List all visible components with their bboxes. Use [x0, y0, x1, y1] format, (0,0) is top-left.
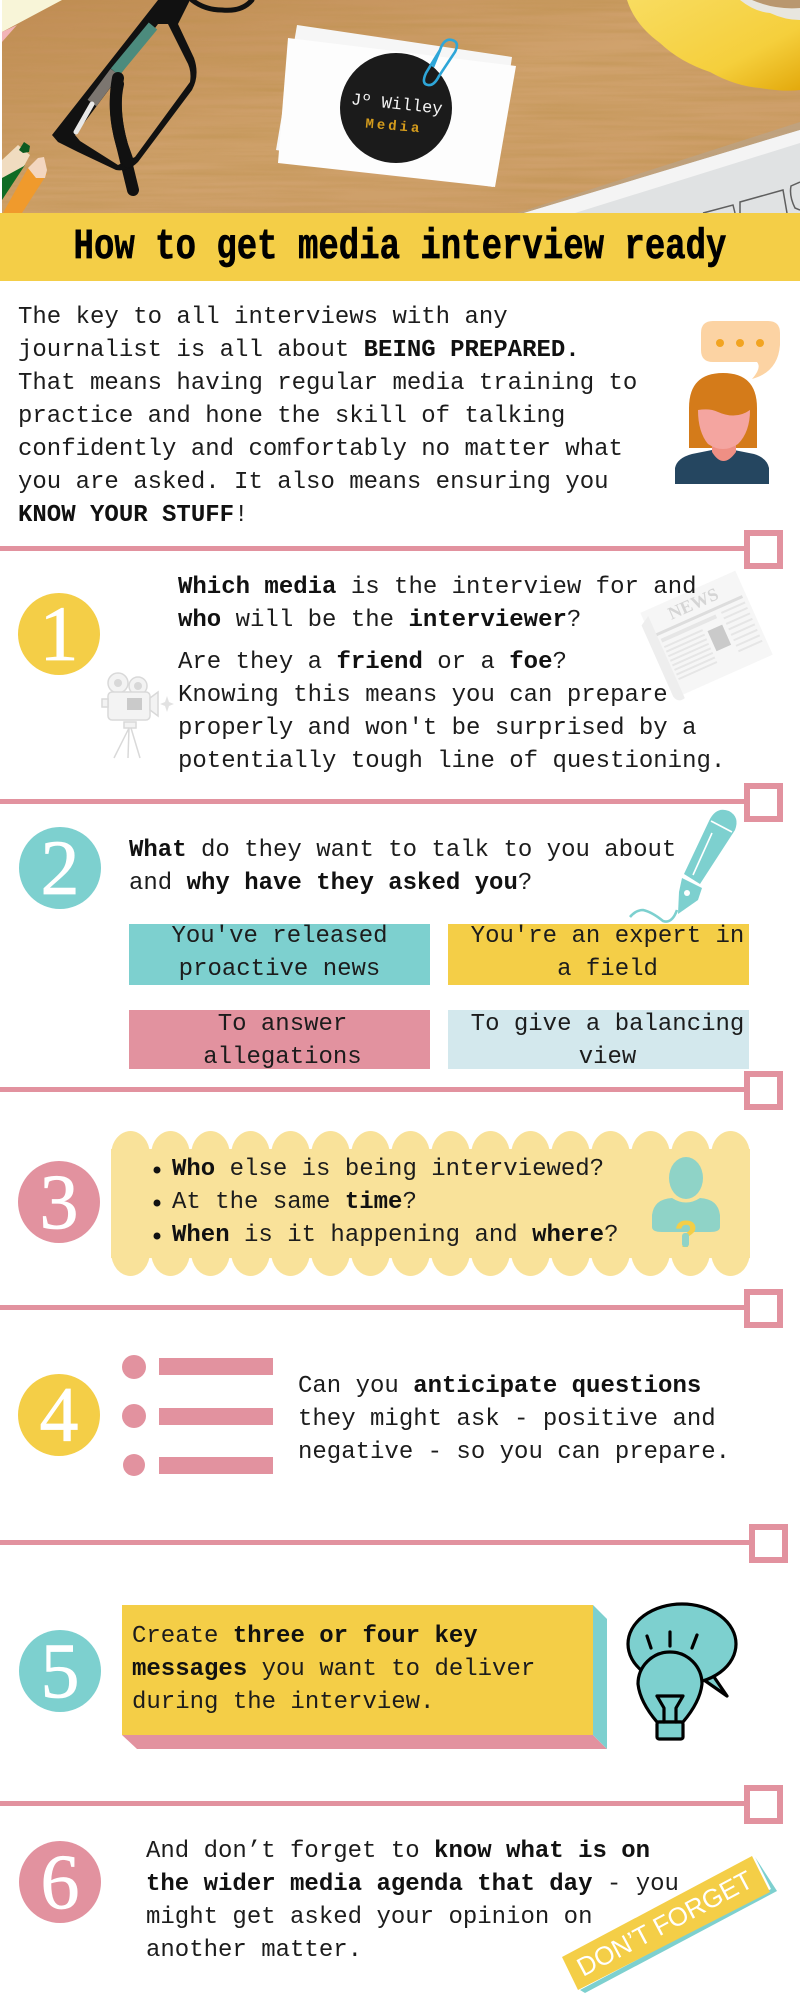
- paperclip: [424, 40, 457, 85]
- logo disc: [340, 53, 452, 163]
- step 6 text: And don’t forget to know what is on the wider media agenda that day - you might get asked your opinion on another matter.: [146, 1838, 679, 1964]
- divider end square: [749, 1524, 788, 1563]
- keyboard: [517, 122, 800, 213]
- divider: [0, 1540, 755, 1545]
- scalloped panel: [111, 1131, 750, 1276]
- number 4: 4: [40, 1371, 78, 1458]
- option box: proactive news: [129, 924, 430, 985]
- intro text: The key to all interviews with any journalist is all about BEING PREPARED. That means having regular media training to practice and hone the skill of talking confidently and comfortably no matter what you are asked. It also means ensuring you KNOW YOUR STUFF!: [18, 304, 637, 529]
- option box: allegations: [129, 1010, 430, 1069]
- number 5: [19, 1630, 101, 1712]
- option box: expert: You're an expert in a field: [471, 923, 744, 983]
- number 1: [18, 593, 100, 675]
- icon: fountain pen: [629, 810, 736, 923]
- step 1 detail text: Are they a friend or a foe? Knowing this means you can prepare properly and won't be surprised by a potentially tough line of questioning.: [178, 649, 725, 775]
- business card: Media: [365, 117, 423, 137]
- number 6: 6: [40, 1838, 80, 1925]
- icon: newspaper: NEWS: [665, 584, 721, 624]
- divider end square: [744, 530, 783, 569]
- divider: [0, 1801, 750, 1806]
- bullet dots: [154, 1166, 160, 1240]
- yellow cup: [627, 0, 800, 91]
- step 1 text: Which media is the interview for and who will be the interviewer?: [178, 574, 696, 634]
- icon: woman with speech bubble: [675, 321, 780, 484]
- icon: film camera: [101, 672, 174, 758]
- hero photo: desk with glasses, business card and cup: [2, 0, 800, 213]
- divider end square: [744, 1785, 783, 1824]
- number 2: 2: [40, 824, 80, 911]
- icon: lightbulb speech bubble: [626, 1602, 738, 1741]
- option box: balancing view: To give a balancing view: [471, 1011, 744, 1071]
- number 4: [18, 1374, 100, 1456]
- divider end square: [744, 1289, 783, 1328]
- title band: [0, 213, 800, 281]
- divider: [0, 546, 750, 551]
- title band: How to get media interview ready: [74, 224, 726, 272]
- glasses: [52, 0, 252, 190]
- step 5 text: Create three or four key messages you want to deliver during the interview.: [132, 1623, 535, 1716]
- number 3: 3: [40, 1158, 78, 1245]
- divider end square: [744, 1071, 783, 1110]
- icon: newspaper: [641, 571, 772, 700]
- step 4 text: Can you anticipate questions they might ask - positive and negative - so you can prepare.: [298, 1373, 730, 1466]
- divider end square: [744, 783, 783, 822]
- divider: [0, 799, 750, 804]
- number 2: [19, 827, 101, 909]
- option box: proactive news: You've released proactive news: [171, 923, 388, 983]
- business card: [276, 25, 516, 187]
- icon: checklist: [122, 1355, 273, 1476]
- step 3 bullets: Who else is being interviewed? At the same time? When is it happening and where?: [172, 1156, 618, 1249]
- icon: person with question mark: [652, 1157, 720, 1256]
- option box: allegations: To answer allegations: [203, 1011, 362, 1071]
- divider: [0, 1087, 750, 1092]
- don't forget banner: DON’T FORGET: [572, 1864, 758, 1982]
- step 2 text: What do they want to talk to you about and why have they asked you?: [129, 837, 676, 897]
- pencils: [2, 142, 47, 213]
- number 1: 1: [40, 590, 78, 677]
- icon: person with question mark: ?: [674, 1214, 698, 1256]
- number 3: [18, 1161, 100, 1243]
- divider: [0, 1305, 750, 1310]
- number 5: 5: [40, 1627, 80, 1714]
- 3D box for key messages: [122, 1605, 607, 1749]
- number 6: [19, 1841, 101, 1923]
- business card: Jº Willey: [350, 91, 443, 120]
